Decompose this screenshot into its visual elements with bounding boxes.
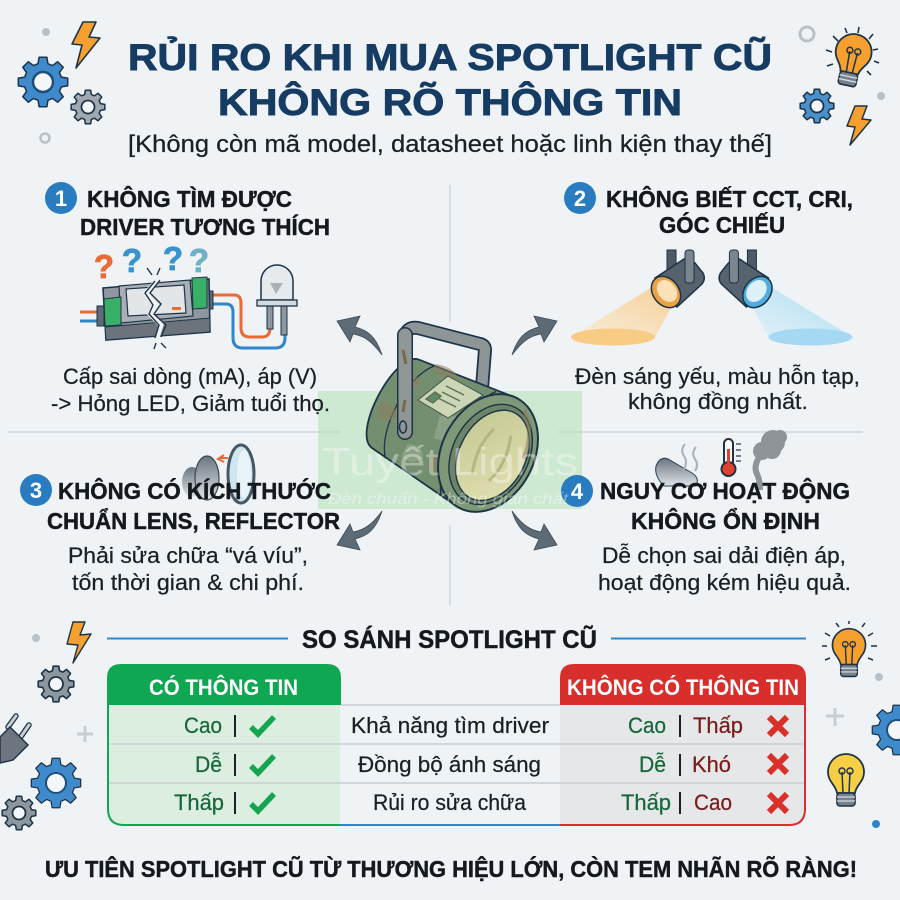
row separators <box>108 705 805 783</box>
heading 4: NGUY CƠ HOẠT ĐỘNG <box>600 477 850 504</box>
row: light matching: Dễ <box>195 752 222 777</box>
bottom call to action: ƯU TIÊN SPOTLIGHT CŨ TỪ THƯƠNG HIỆU LỚN, CÒN TEM NHÃN RÕ RÀNG! <box>45 855 857 882</box>
row: light matching <box>195 752 787 777</box>
body text 2: Đèn sáng yếu, màu hỗn tạp, <box>575 364 860 389</box>
body text 1: -> Hỏng LED, Giảm tuổi thọ. <box>51 391 330 416</box>
row: light matching: Đồng bộ ánh sáng <box>358 752 541 777</box>
row: driver: Thấp <box>693 713 743 738</box>
decoration: bottom left icons <box>0 622 93 830</box>
body text 2 <box>575 364 860 414</box>
heading 3: KHÔNG CÓ KÍCH THƯỚC <box>58 477 331 504</box>
icon: broken driver and LED: ? <box>94 248 114 285</box>
badge 3 <box>20 474 52 506</box>
badge 2 <box>564 182 596 214</box>
heading 4 <box>600 477 850 534</box>
heading 2 <box>606 185 853 238</box>
row: repair risk: Thấp <box>621 790 671 815</box>
row: repair risk: Thấp <box>174 790 224 815</box>
badge 3: 3 <box>30 478 42 503</box>
watermark panel <box>318 391 582 509</box>
body text 1: Cấp sai dòng (mA), áp (V) <box>63 364 317 389</box>
decoration: top right icons <box>800 27 885 145</box>
subtitle: [Không còn mã model, datasheet hoặc linh kiện thay thế] <box>128 131 772 158</box>
body text 1 <box>51 364 330 416</box>
watermark text <box>322 441 578 508</box>
heading 1 <box>80 185 330 240</box>
column: has information <box>107 664 341 825</box>
panel: risk 4 <box>561 430 851 595</box>
heading 3: CHUẨN LENS, REFLECTOR <box>47 507 340 534</box>
table border <box>108 705 805 825</box>
icon: overheating and smoke <box>656 430 787 490</box>
arrow: to risk 3 <box>337 511 382 550</box>
decoration: bottom right icons <box>822 621 900 828</box>
arrow: to risk 1 <box>337 316 382 355</box>
column: no information: KHÔNG CÓ THÔNG TIN <box>567 675 799 700</box>
row: driver <box>184 713 787 738</box>
row: repair risk <box>174 790 787 815</box>
icon: warm spotlight <box>571 250 704 346</box>
badge 2: 2 <box>574 186 586 211</box>
section dividers <box>8 185 863 605</box>
row: light matching: Khó <box>692 752 731 777</box>
badge 1 <box>45 182 77 214</box>
heading 2: GÓC CHIẾU <box>659 211 785 238</box>
panel: risk 3 <box>20 445 340 595</box>
heading 1: KHÔNG TÌM ĐƯỢC <box>87 185 292 212</box>
column: has information: CÓ THÔNG TIN <box>149 675 298 700</box>
row: driver: Cao <box>184 713 222 738</box>
central old spotlight <box>350 328 558 529</box>
panel: risk 2 <box>564 182 860 414</box>
panel: risk 1 <box>45 182 330 416</box>
arrow: to risk 4 <box>512 511 557 550</box>
body text 3 <box>68 543 308 595</box>
watermark text: Tuyết Lights <box>322 441 578 484</box>
title: KHÔNG RÕ THÔNG TIN <box>218 81 682 123</box>
row: light matching: Dễ <box>639 752 666 777</box>
badge 4 <box>561 475 593 507</box>
comparison heading: SO SÁNH SPOTLIGHT CŨ <box>302 624 597 654</box>
comparison table <box>107 664 806 825</box>
icon: broken driver and LED <box>80 240 297 349</box>
row: repair risk: Rủi ro sửa chữa <box>373 790 527 815</box>
row: driver: Khả năng tìm driver <box>351 713 549 738</box>
body text 2: không đồng nhất. <box>628 389 808 414</box>
heading 1: DRIVER TƯƠNG THÍCH <box>80 213 330 240</box>
decoration: top left icons <box>18 22 105 142</box>
badge 4: 4 <box>571 479 584 504</box>
row: repair risk: Cao <box>694 790 732 815</box>
body text 3: Phải sửa chữa “vá víu”, <box>68 543 308 568</box>
body text 4: Dễ chọn sai dải điện áp, <box>602 543 846 568</box>
icon: broken driver and LED: ? <box>122 242 142 279</box>
icon: lens and reflector <box>182 445 254 503</box>
column: no information <box>560 664 806 825</box>
title <box>128 36 772 123</box>
icon: cool spotlight <box>719 250 852 346</box>
body text 3: tốn thời gian & chi phí. <box>72 570 304 595</box>
icon: broken driver and LED: ? <box>189 242 209 279</box>
row: driver: Cao <box>628 713 666 738</box>
icon: broken driver and LED: ? <box>163 240 183 277</box>
badge 1: 1 <box>55 186 67 211</box>
watermark text: Đèn chuẩn - Không gian chất <box>328 490 569 508</box>
heading 4: KHÔNG ỔN ĐỊNH <box>631 507 820 534</box>
arrow: to risk 2 <box>512 316 557 355</box>
heading 3 <box>47 477 340 534</box>
body text 4 <box>598 543 851 595</box>
title: RỦI RO KHI MUA SPOTLIGHT CŨ <box>128 36 772 78</box>
body text 4: hoạt động kém hiệu quả. <box>598 570 851 595</box>
heading 2: KHÔNG BIẾT CCT, CRI, <box>606 185 853 212</box>
